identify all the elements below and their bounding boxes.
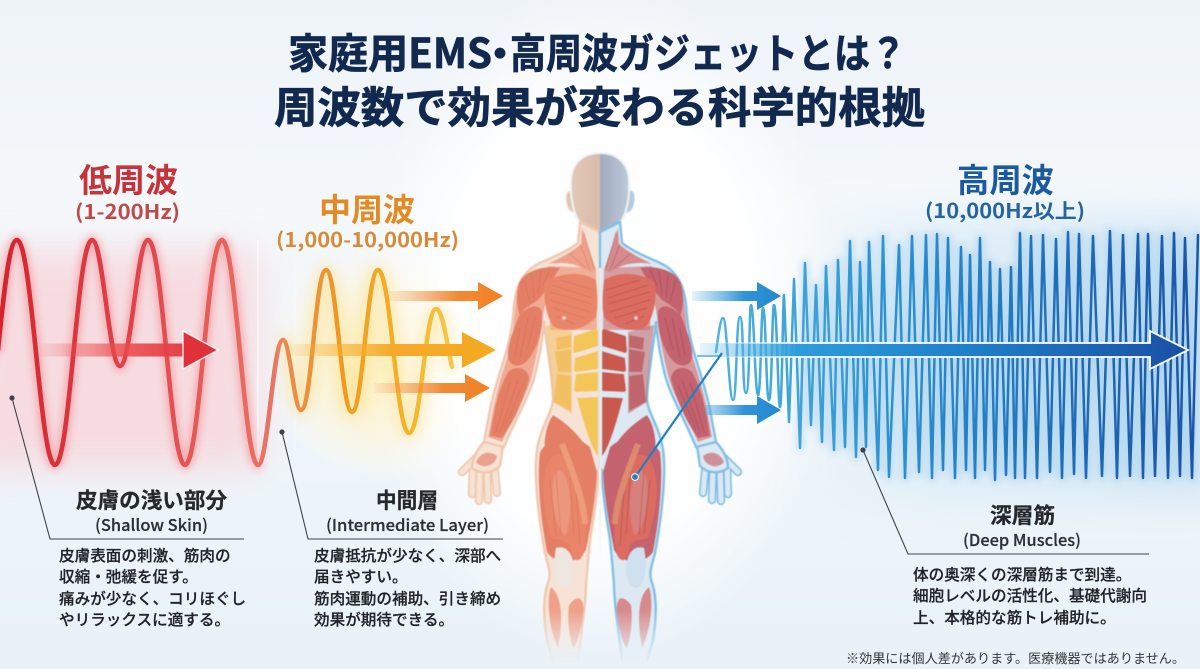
text block: deep muscles: 上、本格的な筋トレ補助に。 <box>913 606 1116 628</box>
text block: shallow skin: やリラックスに適する。 <box>59 608 230 630</box>
label: low frequency: (1-200Hz) <box>75 196 180 225</box>
leader: shallow skin <box>9 395 244 539</box>
label: mid frequency: 中周波 <box>319 185 415 231</box>
high frequency wave <box>716 231 1198 480</box>
label: low frequency <box>75 154 180 225</box>
label: high frequency <box>925 154 1085 224</box>
text block: shallow skin: 痛みが少なく、コリほぐし <box>59 587 246 609</box>
arrow: high frequency penetration <box>700 331 1188 369</box>
text block: deep muscles: (Deep Muscles) <box>963 527 1081 551</box>
label: low frequency: 低周波 <box>79 154 178 202</box>
label: mid frequency <box>276 185 459 253</box>
text block: deep muscles: 細胞レベルの活性化、基礎代謝向 <box>913 584 1147 606</box>
head <box>566 153 634 235</box>
text block: deep muscles: 深層筋 <box>990 499 1055 530</box>
leader: intermediate layer <box>279 429 503 539</box>
text block: intermediate layer: 届きやすい。 <box>314 565 408 587</box>
text block: shallow skin <box>59 484 246 630</box>
text block: intermediate layer <box>314 484 501 630</box>
title <box>274 20 925 136</box>
low frequency wave <box>0 240 283 465</box>
pointer to deep muscle <box>632 353 722 480</box>
right half cool muscles <box>599 222 738 669</box>
title: 家庭用EMS <box>288 20 492 80</box>
text block: shallow skin: (Shallow Skin) <box>95 512 208 536</box>
text block: intermediate layer: 中間層 <box>376 484 438 515</box>
footnote: ※効果には個人差があります。医療機器ではありません。 <box>846 648 1185 667</box>
text block: shallow skin: 皮膚の浅い部分 <box>76 484 227 515</box>
title: ・ <box>480 22 520 80</box>
leader: deep muscles <box>860 447 1149 554</box>
mid frequency wave <box>283 270 452 433</box>
label: high frequency: (10,000Hz以上) <box>925 195 1085 224</box>
title: 高周波ガジェットとは？ <box>510 20 906 80</box>
arrows: mid frequency <box>290 282 503 402</box>
arrows: high frequency into body <box>692 282 781 424</box>
title: 周波数で効果が変わる科学的根拠 <box>274 74 925 136</box>
text block: intermediate layer: 効果が期待できる。 <box>314 608 454 630</box>
text block: intermediate layer: 皮膚抵抗が少なく、深部へ <box>314 544 501 566</box>
left half warm muscles <box>462 222 601 669</box>
label: mid frequency: (1,000-10,000Hz) <box>276 224 459 253</box>
text block: deep muscles <box>913 499 1147 628</box>
text block: shallow skin: 皮膚表面の刺激、筋肉の <box>59 544 231 566</box>
text block: shallow skin: 収縮・弛緩を促す。 <box>59 565 198 587</box>
arrow: low frequency penetration <box>35 331 218 369</box>
label: high frequency: 高周波 <box>957 154 1054 202</box>
text block: deep muscles: 体の奥深くの深層筋まで到達。 <box>913 563 1131 585</box>
text block: intermediate layer: 筋肉運動の補助、引き締め <box>314 587 501 609</box>
text block: intermediate layer: (Intermediate Layer) <box>326 512 489 536</box>
human body figure <box>462 153 738 669</box>
